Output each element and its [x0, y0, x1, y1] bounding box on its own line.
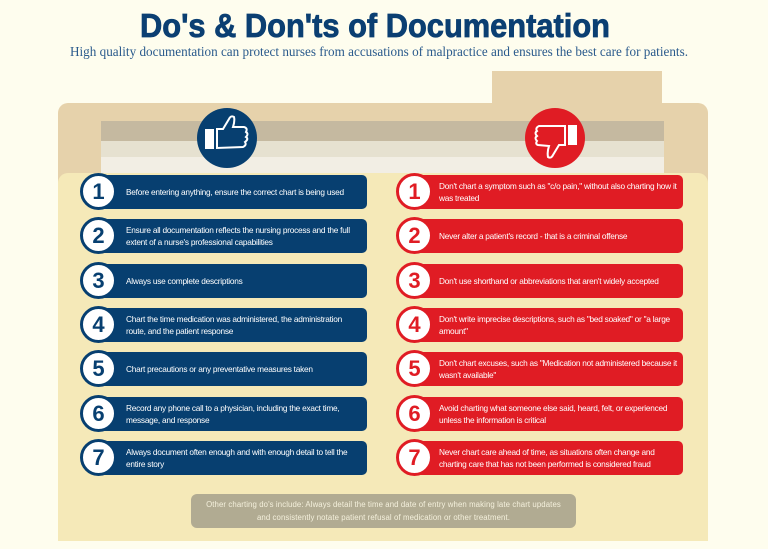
callout: other dos: [191, 494, 576, 528]
do 6: [95, 397, 367, 431]
do 1: Before entering anything, ensure the correct chart is being used: [126, 187, 344, 197]
dont 7: [404, 441, 683, 475]
do 7: [95, 441, 367, 475]
text: 1: [408, 178, 421, 204]
dont 2: [404, 219, 683, 253]
do 2: Ensure all documentation reflects the nursing process and the full extent of a nurse's professional capabilities: [126, 225, 350, 247]
dont 3: Don't use shorthand or abbreviations that aren't widely accepted: [439, 276, 659, 286]
text: 3: [92, 268, 105, 292]
title: Do's & Don'ts of Documentation: [140, 7, 610, 44]
icon: thumbs down: [525, 108, 585, 168]
text: 3: [408, 268, 421, 292]
dont 3: [404, 264, 683, 298]
text: 6: [92, 400, 105, 426]
icon: thumbs up: [197, 108, 257, 168]
callout: other dos: Other charting do's include: Always detail the time and date of entry when making late chart updates and consistently notate patient refusal of medication or other treatment.: [206, 500, 561, 522]
dont 7: Never chart care ahead of time, as situations often change and charting care that has not been performed is considered fraud: [439, 447, 655, 469]
dont 1: Don't chart a symptom such as "c/o pain," without also charting how it was treated: [439, 181, 677, 203]
dont 6: Avoid charting what someone else said, heard, felt, or experienced unless the information is critical: [439, 403, 667, 425]
dont 1: [404, 175, 683, 209]
do 1: [95, 175, 367, 209]
dont 5: Don't chart excuses, such as "Medication not administered because it wasn't available": [439, 358, 677, 380]
text: 1: [92, 178, 105, 204]
dont 2: Never alter a patient's record - that is a criminal offense: [439, 231, 627, 241]
do 2: [95, 219, 367, 253]
dont 4: [404, 308, 683, 342]
title: High quality documentation can protect nurses from accusations of malpractice and ensures the best care for patients.: [70, 45, 688, 60]
do 4: [95, 308, 367, 342]
dont 4: Don't write imprecise descriptions, such as "bed soaked" or "a large amount": [439, 314, 670, 336]
do 4: Chart the time medication was administered, the administration route, and the patient response: [126, 314, 342, 336]
text: 5: [408, 356, 421, 380]
do 3: [95, 264, 367, 298]
dont 6: [404, 397, 683, 431]
do 7: Always document often enough and with enough detail to tell the entire story: [126, 447, 347, 469]
folder back: [58, 71, 708, 541]
do 3: Always use complete descriptions: [126, 276, 243, 286]
text: 7: [408, 444, 421, 470]
text: 4: [408, 312, 421, 336]
text: 5: [92, 356, 105, 380]
text: 2: [408, 222, 421, 248]
title: [70, 7, 688, 60]
text: 7: [92, 444, 105, 470]
dont 5: [404, 352, 683, 386]
do 6: Record any phone call to a physician, including the exact time, message, and response: [126, 403, 339, 425]
text: 4: [92, 312, 105, 336]
do 5: Chart precautions or any preventative measures taken: [126, 364, 313, 374]
text: 6: [408, 400, 421, 426]
text: 2: [92, 222, 105, 248]
do 5: [95, 352, 367, 386]
